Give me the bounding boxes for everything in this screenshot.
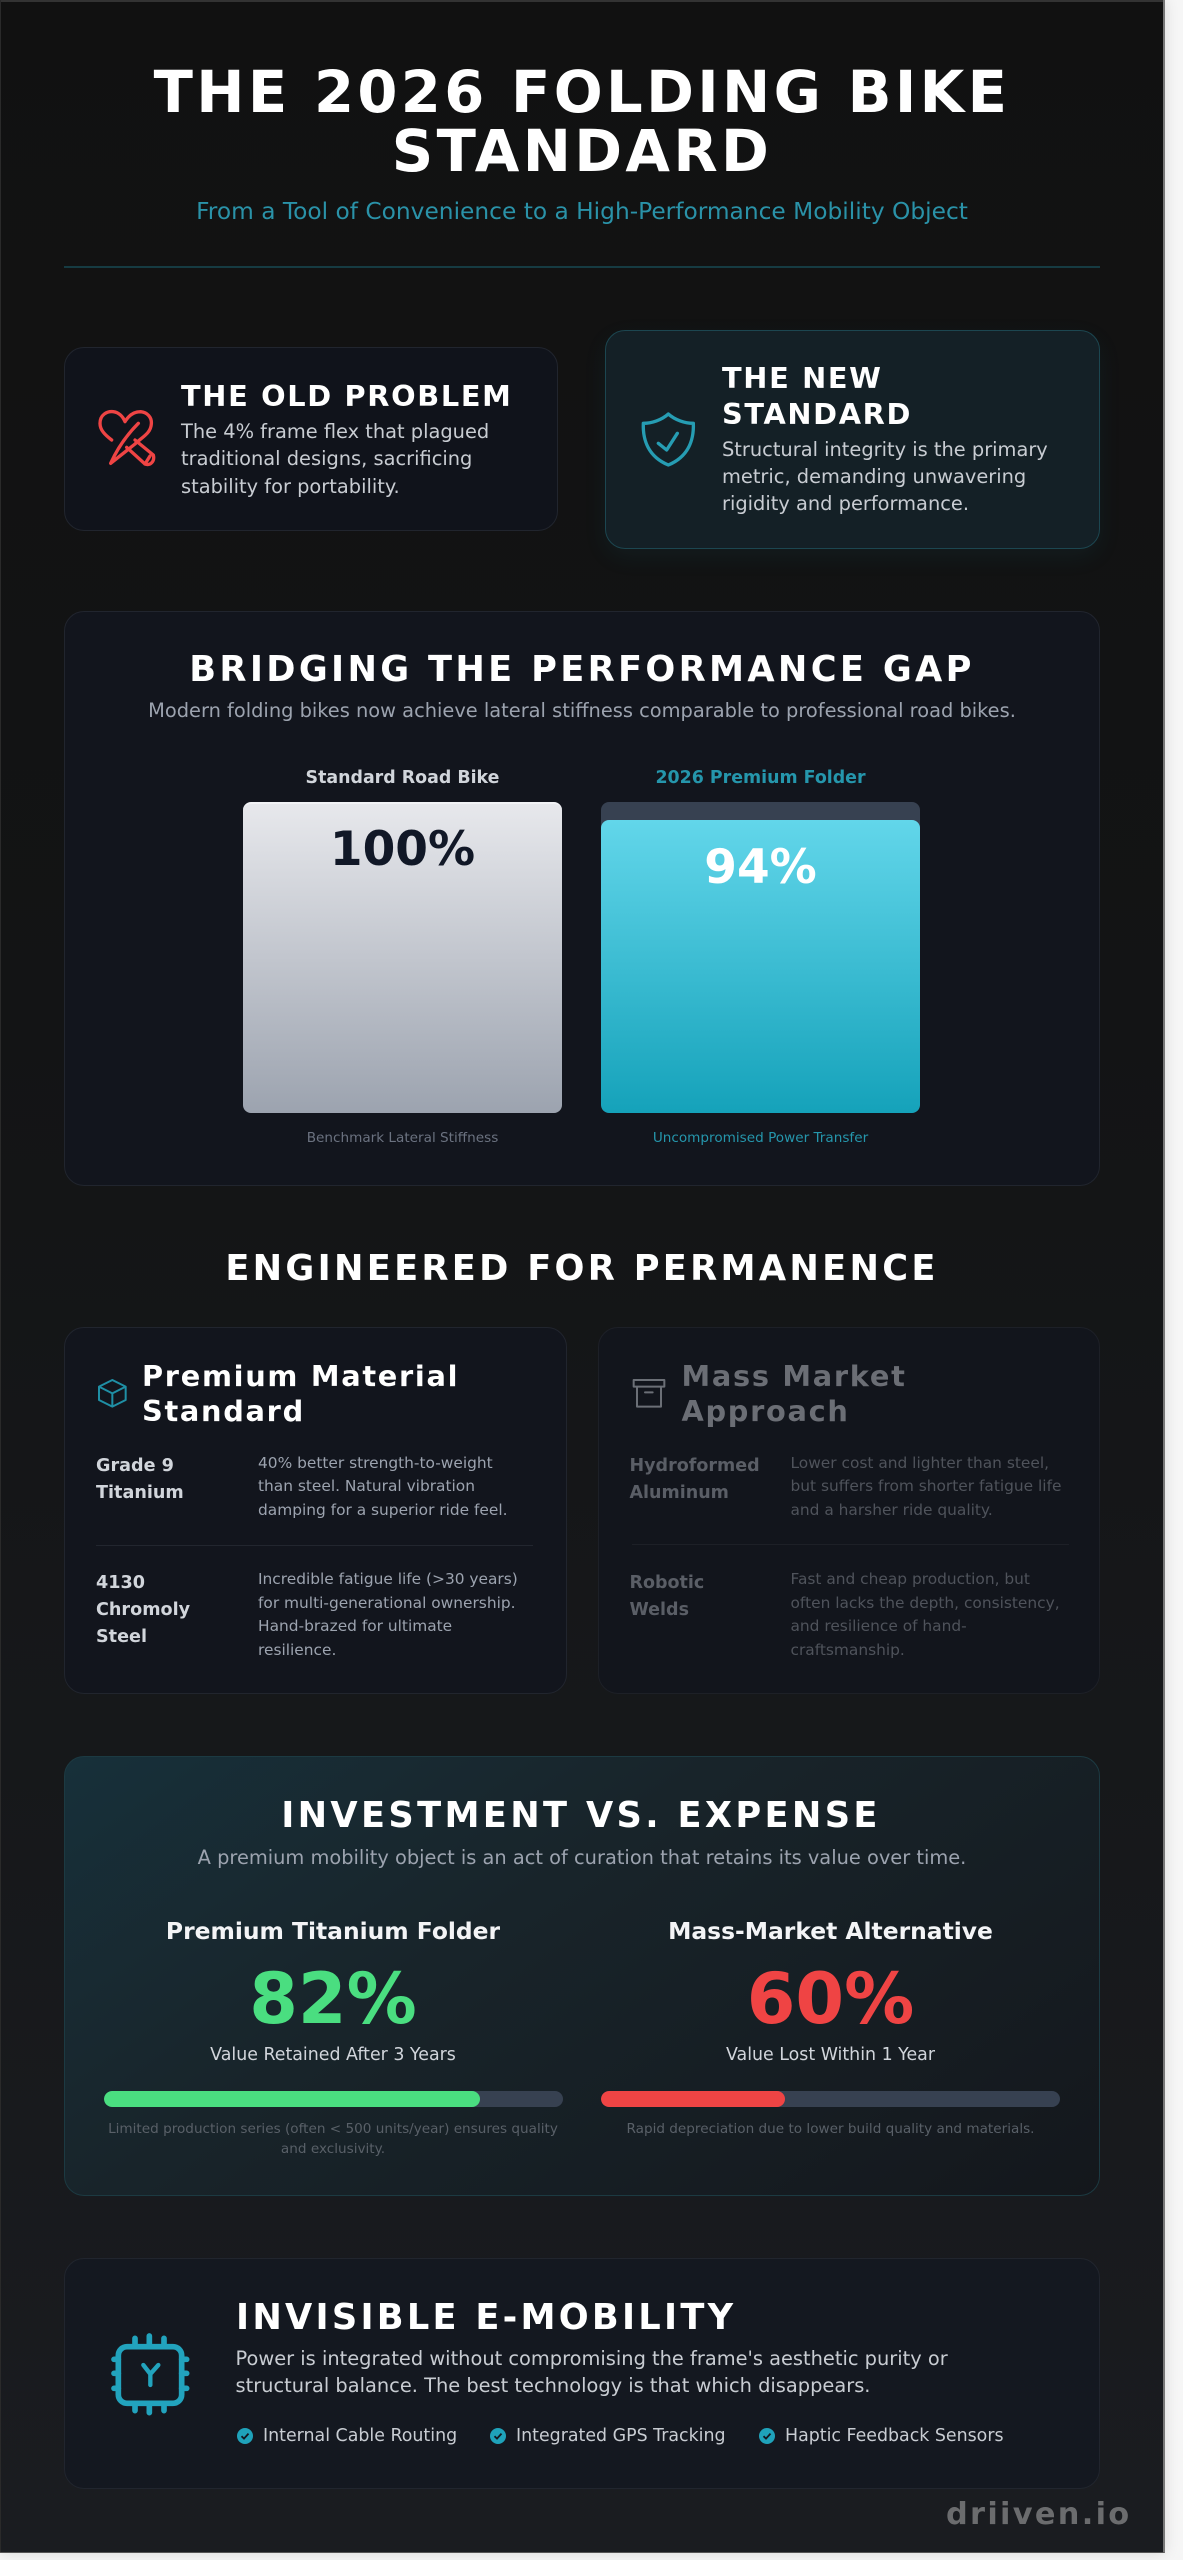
progress bar [601, 2091, 1060, 2107]
material description: Lower cost and lighter than steel, [790, 1454, 1049, 1472]
heading: STANDARD [722, 396, 912, 430]
heading [682, 1359, 907, 1428]
material description: Fast and cheap production, but [790, 1570, 1030, 1588]
material description: but suffers from shorter fatigue life [790, 1477, 1061, 1495]
stat: 82%: 82% [249, 1958, 417, 2040]
icon: check [490, 2428, 506, 2444]
description: The 4% frame flex that plagued [181, 420, 489, 443]
value: 94% [704, 840, 817, 895]
material description: Hand-brazed for ultimate [258, 1617, 452, 1635]
divider [64, 266, 1100, 268]
panel: mass market approach [598, 1327, 1100, 1694]
column: premium titanium folder [104, 1917, 563, 2157]
heading: THE NEW [722, 360, 883, 394]
feature: integrated gps tracking [490, 2426, 726, 2446]
footnote [108, 2121, 558, 2157]
bar label: premium folder: 2026 Premium Folder [655, 768, 866, 788]
description: traditional designs, sacrificing [181, 447, 472, 470]
panel: investment vs expense [64, 1756, 1100, 2196]
feature: haptic feedback sensors [759, 2426, 1004, 2446]
description: metric, demanding unwavering [722, 465, 1026, 488]
heading: THE OLD PROBLEM [181, 379, 512, 413]
material description: 40% better strength-to-weight [258, 1454, 493, 1472]
title [154, 59, 1010, 185]
material description [790, 1570, 1060, 1658]
material name: Titanium [96, 1483, 184, 1503]
label: Integrated GPS Tracking [516, 2426, 726, 2446]
icon: archive box [632, 1379, 666, 1408]
label: Haptic Feedback Sensors [785, 2426, 1004, 2446]
bar label: standard road bike: Standard Road Bike [306, 768, 499, 788]
icon: cpu chip [111, 2333, 190, 2416]
material description: damping for a superior ride feel. [258, 1501, 508, 1519]
heading: Standard [142, 1394, 305, 1428]
icon: broken heart with pencil [98, 410, 156, 466]
panel: new standard [605, 330, 1100, 548]
bar caption: benchmark: Benchmark Lateral Stiffness [307, 1130, 498, 1146]
feature list [237, 2426, 1004, 2446]
description: Modern folding bikes now achieve lateral stiffness comparable to professional road bikes. [148, 699, 1016, 722]
title: STANDARD [392, 118, 772, 185]
heading: INVESTMENT VS. EXPENSE [281, 1795, 881, 1836]
bar: standard road bike 100% [243, 802, 562, 1112]
header [64, 59, 1100, 268]
material description: and a harsher ride quality. [790, 1501, 993, 1519]
stat label: Value Retained After 3 Years [210, 2045, 456, 2065]
heading: Approach [682, 1394, 850, 1428]
progress bar [104, 2091, 562, 2107]
material description: resilience. [258, 1640, 336, 1658]
row: 4130 chromoly steel [96, 1570, 518, 1658]
row: hydroformed aluminum [630, 1454, 1061, 1519]
bar chart [243, 768, 920, 1146]
material description: often lacks the depth, consistency, [790, 1594, 1060, 1612]
description: Power is integrated without compromising the frame's aesthetic purity or [236, 2347, 948, 2370]
icon: check [237, 2428, 253, 2444]
material name [630, 1572, 704, 1620]
description: rigidity and performance. [722, 492, 969, 515]
material description: than steel. Natural vibration [258, 1477, 475, 1495]
feature: internal cable routing [237, 2426, 457, 2446]
material name: Robotic [630, 1572, 704, 1592]
material name: Chromoly [96, 1600, 190, 1620]
material description [258, 1454, 508, 1519]
value: 100% [330, 822, 475, 877]
icon: shield check [642, 412, 696, 467]
footnote: Limited production series (often < 500 units/year) ensures quality [108, 2121, 558, 2137]
heading [142, 1359, 459, 1428]
material name: Aluminum [630, 1483, 729, 1503]
panel: premium material standard [64, 1327, 566, 1694]
panel: invisible e-mobility [64, 2258, 1100, 2489]
heading [722, 360, 912, 430]
heading: Mass Market [682, 1359, 907, 1393]
row divider [96, 1545, 533, 1546]
bar: premium folder 94% [601, 802, 920, 1112]
heading: INVISIBLE E-MOBILITY [236, 2297, 736, 2338]
description: Structural integrity is the primary [722, 438, 1048, 460]
icon: check [759, 2428, 775, 2444]
material description: and resilience of hand- [790, 1617, 967, 1635]
material description: craftsmanship. [790, 1640, 905, 1658]
watermark: driiven.io [946, 2496, 1131, 2532]
description [236, 2347, 948, 2397]
material name [96, 1572, 190, 1647]
heading: engineered for permanence: ENGINEERED FOR PERMANENCE [225, 1248, 939, 1288]
title: THE 2026 FOLDING BIKE [154, 59, 1010, 126]
material name [630, 1456, 760, 1503]
material description [258, 1570, 518, 1658]
material name: Hydroformed [630, 1456, 760, 1476]
material description [790, 1454, 1061, 1519]
column: mass-market alternative [601, 1917, 1060, 2137]
panel: old problem [64, 347, 558, 531]
icon: cube [98, 1379, 127, 1408]
row: robotic welds [630, 1570, 1060, 1658]
row: grade 9 titanium [96, 1454, 508, 1519]
heading: BRIDGING THE PERFORMANCE GAP [189, 649, 975, 690]
bar caption: power transfer: Uncompromised Power Transfer [653, 1130, 868, 1146]
column heading: Mass-Market Alternative [668, 1917, 993, 1945]
panel: performance gap [64, 611, 1100, 1186]
footnote: and exclusivity. [281, 2141, 385, 2157]
material name: Steel [96, 1627, 147, 1647]
description [722, 438, 1048, 515]
progress fill [104, 2091, 480, 2107]
material name: 4130 [96, 1572, 145, 1592]
stat: 60%: 60% [747, 1958, 914, 2040]
footnote: Rapid depreciation due to lower build quality and materials. [626, 2121, 1035, 2137]
column heading: Premium Titanium Folder [166, 1917, 500, 1945]
label: Internal Cable Routing [263, 2426, 457, 2446]
material name: Grade 9 [96, 1456, 174, 1476]
material description: for multi-generational ownership. [258, 1594, 516, 1612]
value fill [601, 820, 920, 1112]
subtitle: From a Tool of Convenience to a High-Performance Mobility Object [196, 198, 968, 225]
heading: Premium Material [142, 1359, 459, 1393]
row divider [632, 1544, 1068, 1545]
stat label: Value Lost Within 1 Year [726, 2045, 935, 2065]
material name [96, 1456, 184, 1503]
progress fill [601, 2091, 785, 2107]
description: structural balance. The best technology is that which disappears. [236, 2374, 870, 2397]
material name: Welds [630, 1600, 689, 1620]
description [180, 420, 489, 498]
description: A premium mobility object is an act of curation that retains its value over time. [198, 1846, 966, 1868]
description: stability for portability. [181, 475, 400, 498]
material description: Incredible fatigue life (>30 years) [258, 1570, 518, 1588]
